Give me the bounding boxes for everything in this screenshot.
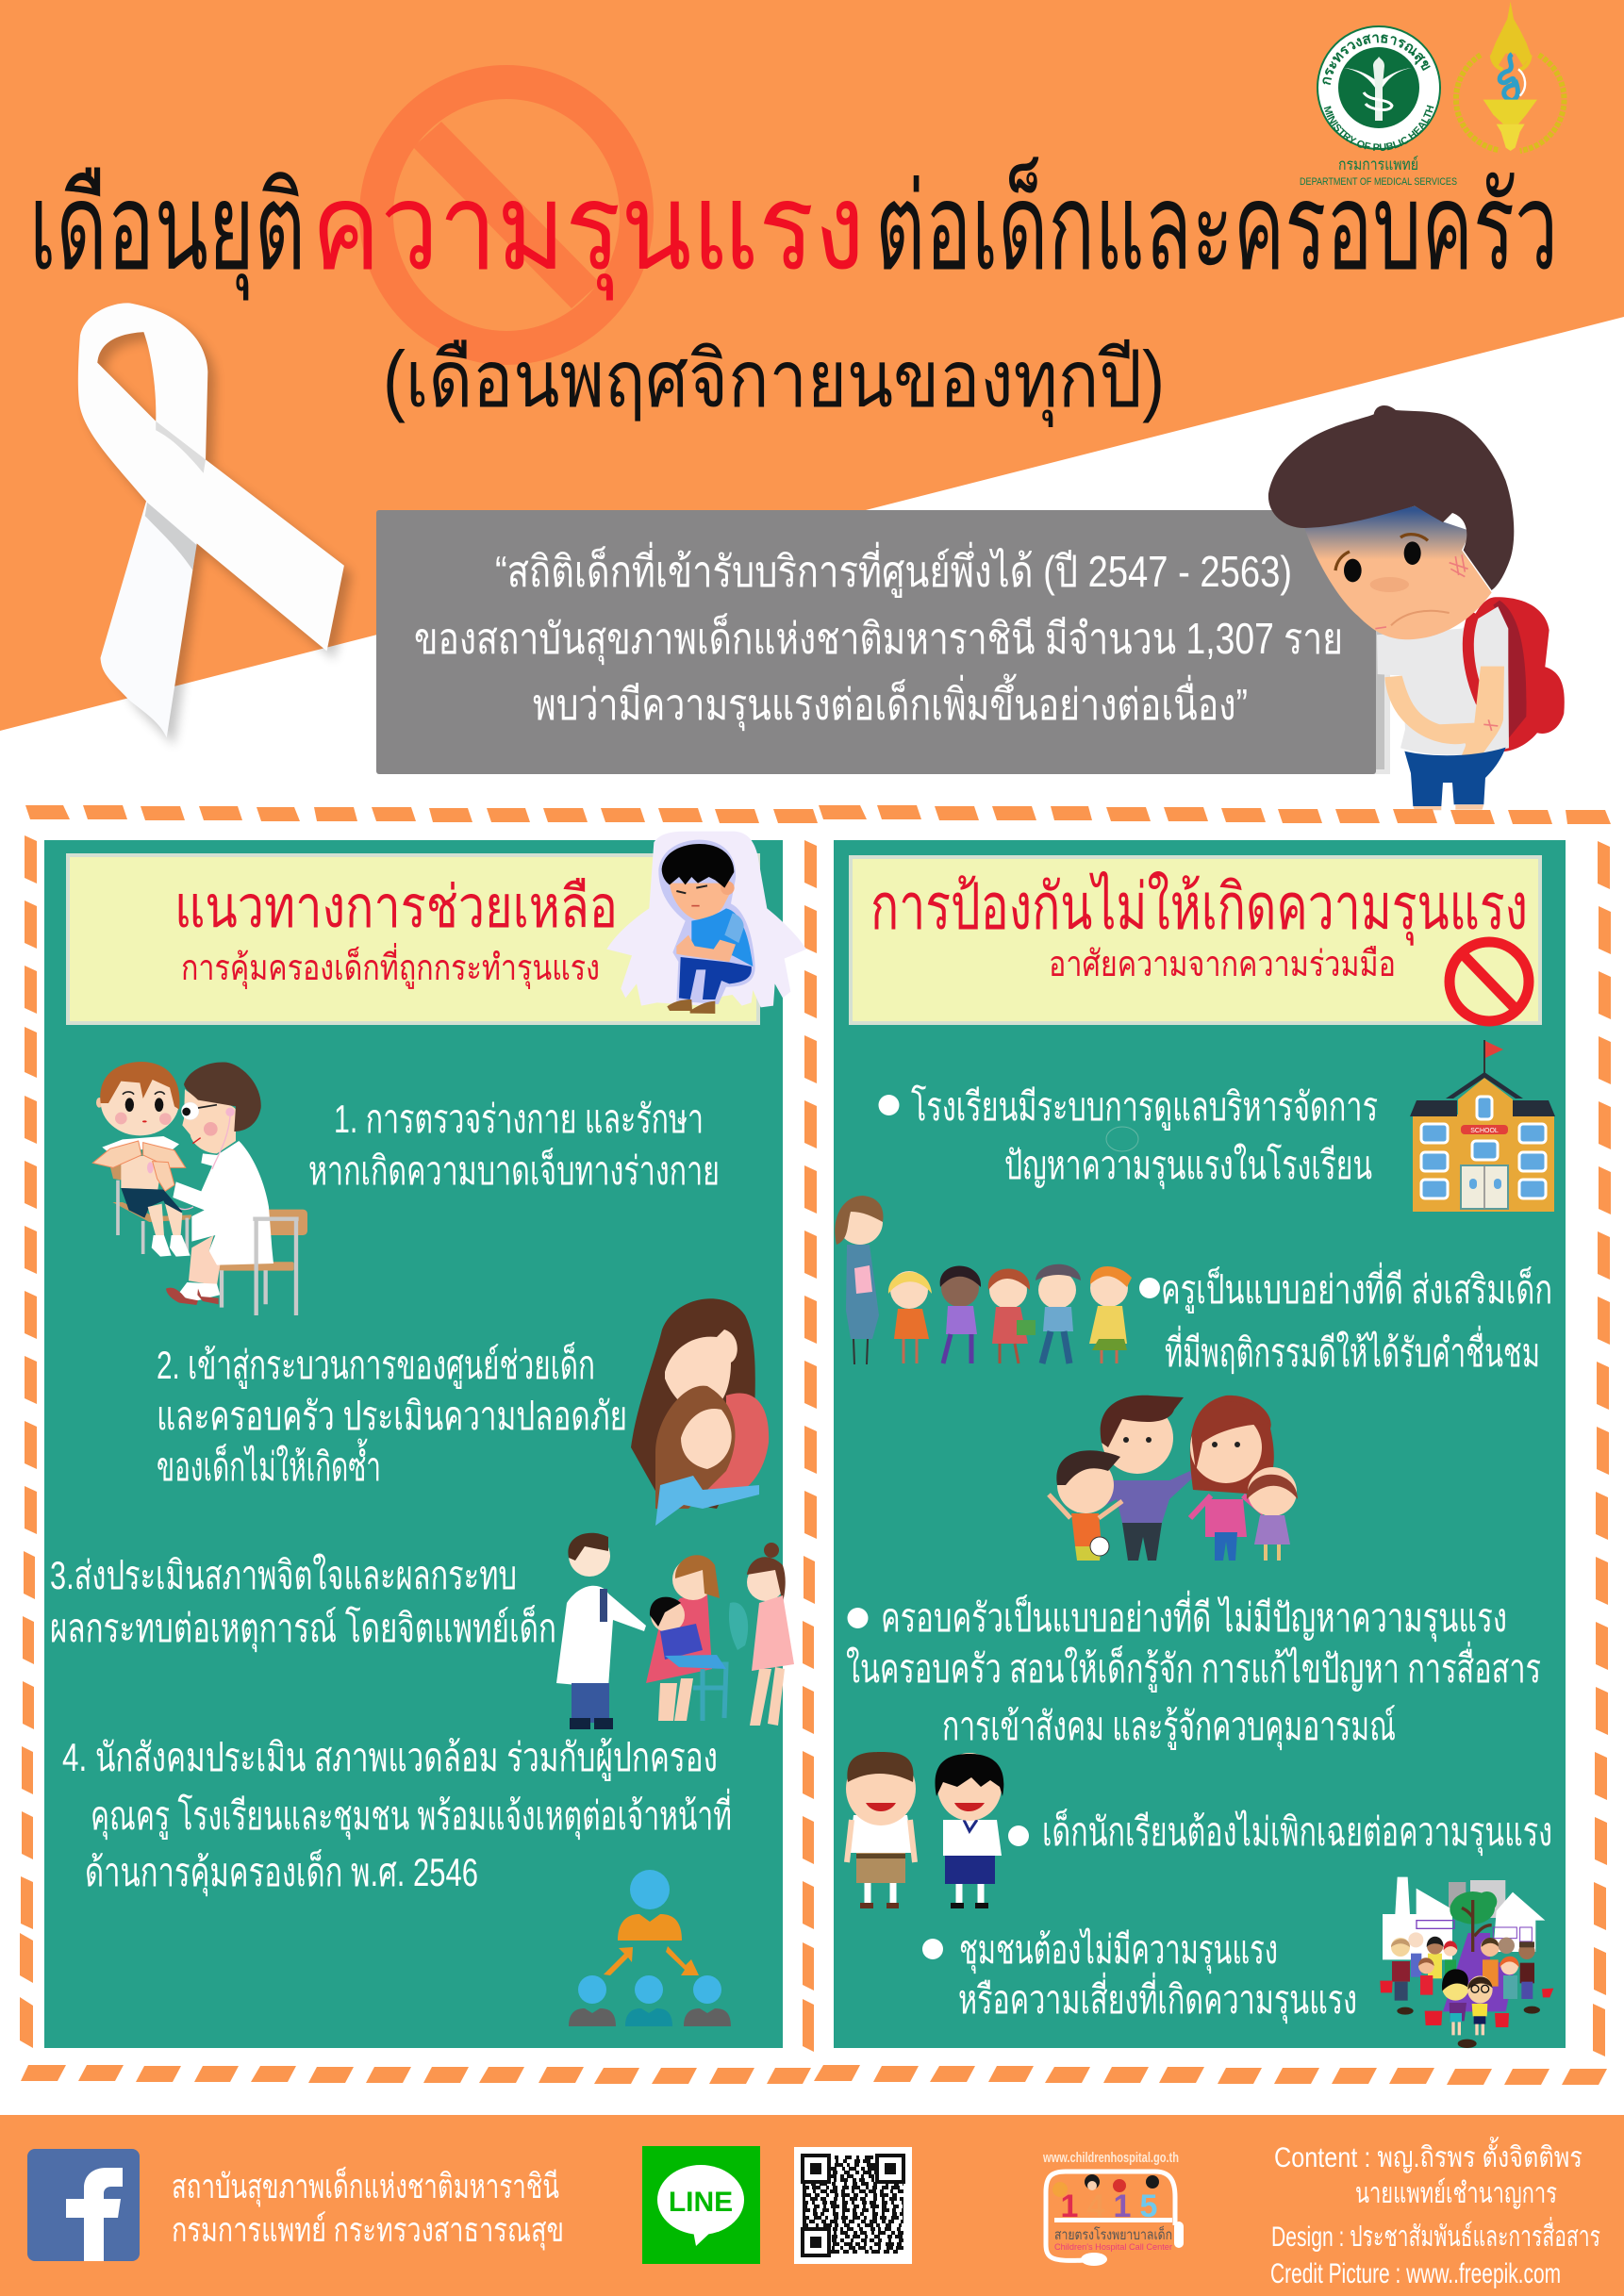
logo: Ministry of Public Health: กระทรวงสาธารณสุข bbox=[1322, 34, 1431, 85]
footer organisation text: สถาบันสุขภาพเด็กแห่งชาติมหาราชินี bbox=[172, 2165, 559, 2207]
illustration: mother hugging child bbox=[631, 1298, 769, 1526]
heading: help guidelines: การคุ้มครองเด็กที่ถูกกระทำรุนแรง bbox=[181, 943, 600, 989]
logo: 1415 call center: 1 bbox=[1061, 2189, 1078, 2224]
step 1 text: หากเกิดความบาดเจ็บทางร่างกาย bbox=[308, 1148, 720, 1193]
logo: 1415 call center bbox=[1042, 2150, 1184, 2266]
illustration: students bbox=[846, 1752, 1003, 1908]
step 4 text: คุณครู โรงเรียนและชุมชน พร้อมแจ้งเหตุต่อเจ้าหน้าที่ bbox=[91, 1789, 732, 1841]
panel: violence prevention bbox=[834, 840, 1566, 2048]
panel: footer bbox=[0, 2115, 1624, 2296]
bullet 1 text: โรงเรียนมีระบบการดูแลบริหารจัดการ bbox=[911, 1083, 1378, 1131]
decorative scribble bbox=[1106, 1127, 1138, 1151]
step 4 text: 4. นักสังคมประเมิน สภาพแวดล้อม ร่วมกับผู้ปกครอง bbox=[62, 1735, 718, 1781]
illustration: community group bbox=[1380, 1877, 1553, 2048]
step 1 text bbox=[308, 1097, 720, 1193]
heading: violence prevention: อาศัยความจากความร่วมมือ bbox=[1049, 945, 1396, 984]
QR code bbox=[794, 2147, 912, 2264]
logo: 1415 call center: 4 bbox=[1087, 2189, 1105, 2224]
logo text: department of medical services bbox=[1300, 156, 1457, 188]
logo: 1415 call center: สายตรงโรงพยาบาลเด็ก bbox=[1054, 2225, 1172, 2243]
bullet 3 text bbox=[846, 1591, 1541, 1751]
step 2 text bbox=[157, 1342, 627, 1489]
panel: border dashes bbox=[20, 805, 1611, 2085]
illustration: child in protective hands bbox=[606, 832, 806, 1014]
title: เดือนยุติ bbox=[29, 160, 306, 301]
footer organisation text bbox=[172, 2165, 564, 2251]
bullet 1 text: ปัญหาความรุนแรงในโรงเรียน bbox=[1004, 1142, 1372, 1190]
bullet 5 text: ชุมชนต้องไม่มีความรุนแรง bbox=[959, 1927, 1278, 1974]
logo: royal emblem bbox=[1456, 2, 1565, 151]
illustration: school building: SCHOOL bbox=[1470, 1128, 1499, 1134]
illustration: doctor with family bbox=[556, 1533, 794, 1729]
subtitle: (เดือนพฤศจิกายนของทุกปี) bbox=[383, 335, 1165, 428]
illustration: sad boy with backpack bbox=[1268, 405, 1565, 810]
bullet 5 text: หรือความเสี่ยงที่เกิดความรุนแรง bbox=[958, 1973, 1357, 2024]
step 2 text: และครอบครัว ประเมินความปลอดภัย bbox=[157, 1394, 627, 1438]
title bbox=[29, 156, 1558, 301]
step 2 text: 2. เข้าสู่กระบวนการของศูนย์ช่วยเด็ก bbox=[157, 1342, 595, 1389]
title: ความรุนแรง bbox=[311, 160, 865, 301]
step 4 text bbox=[62, 1735, 732, 1897]
step 3 text bbox=[50, 1553, 556, 1653]
logo text: department of medical services: DEPARTMENT OF MEDICAL SERVICES bbox=[1300, 176, 1457, 188]
step 3 text: ผลกระทบต่อเหตุการณ์ โดยจิตแพทย์เด็ก bbox=[50, 1605, 556, 1653]
illustration: school building bbox=[1410, 1040, 1555, 1212]
icon: facebook bbox=[27, 2149, 140, 2261]
step 2 text: ของเด็กไม่ให้เกิดซ้ำ bbox=[157, 1438, 381, 1489]
icon: faded prohibition sign bbox=[376, 82, 637, 348]
step 4 text: ด้านการคุ้มครองเด็ก พ.ศ. 2546 bbox=[85, 1849, 478, 1897]
step 3 text: 3.ส่งประเมินสภาพจิตใจและผลกระทบ bbox=[50, 1553, 517, 1597]
logo: Ministry of Public Health: MINISTRY OF PUBLIC HEALTH bbox=[1324, 105, 1433, 151]
logo: Ministry of Public Health bbox=[1317, 25, 1441, 151]
bullet 1 text bbox=[879, 1083, 1378, 1190]
panel: statistics callout bbox=[376, 510, 1390, 774]
logo: 1415 call center: Children's Hospital Call Center bbox=[1054, 2242, 1172, 2252]
bullet 2 text bbox=[1139, 1263, 1552, 1375]
icon: LINE: LINE bbox=[669, 2187, 733, 2218]
heading: help guidelines: แนวทางการช่วยเหลือ bbox=[174, 875, 618, 940]
logo text: department of medical services: กรมการแพทย์ bbox=[1338, 156, 1418, 173]
credits bbox=[1270, 2137, 1600, 2289]
illustration: doctor examining child bbox=[92, 1062, 307, 1315]
illustration: happy family bbox=[1049, 1396, 1298, 1561]
logo: 1415 call center: 1 bbox=[1114, 2189, 1131, 2224]
logo: 1415 call center: www.childrenhospital.go.th bbox=[1042, 2150, 1179, 2166]
bullet 5 text bbox=[922, 1927, 1357, 2024]
illustration: teacher and children bbox=[835, 1196, 1132, 1364]
panel: statistics callout: “สถิติเด็กที่เข้ารับบริการที่ศูนย์พึ่งได้ (ปี 2547 - 2563) bbox=[495, 541, 1292, 598]
footer organisation text: กรมการแพทย์ กระทรวงสาธารณสุข bbox=[172, 2210, 564, 2251]
panel: statistics callout: ของสถาบันสุขภาพเด็กแห่งชาติมหาราชินี มีจำนวน 1,307 ราย bbox=[414, 613, 1343, 666]
panel: statistics callout: พบว่ามีความรุนแรงต่อเด็กเพิ่มขึ้นอย่างต่อเนื่อง” bbox=[533, 673, 1248, 732]
logo: 1415 call center: 5 bbox=[1140, 2189, 1157, 2224]
heading: help guidelines bbox=[68, 855, 758, 1023]
bullet 3 text: การเข้าสังคม และรู้จักควบคุมอารมณ์ bbox=[942, 1704, 1396, 1751]
heading: violence prevention bbox=[851, 857, 1540, 1023]
step 1 text: 1. การตรวจร่างกาย และรักษา bbox=[334, 1097, 704, 1141]
credits: นายแพทย์เชำนาญการ bbox=[1355, 2177, 1557, 2209]
orange diagonal header background bbox=[0, 0, 1624, 731]
icon: white ribbon bbox=[78, 303, 352, 745]
icon: prohibition sign bbox=[1450, 942, 1529, 1021]
icon: LINE bbox=[642, 2146, 760, 2264]
illustration: social worker organisation chart bbox=[569, 1870, 731, 2026]
panel: help guidelines bbox=[44, 832, 806, 2048]
